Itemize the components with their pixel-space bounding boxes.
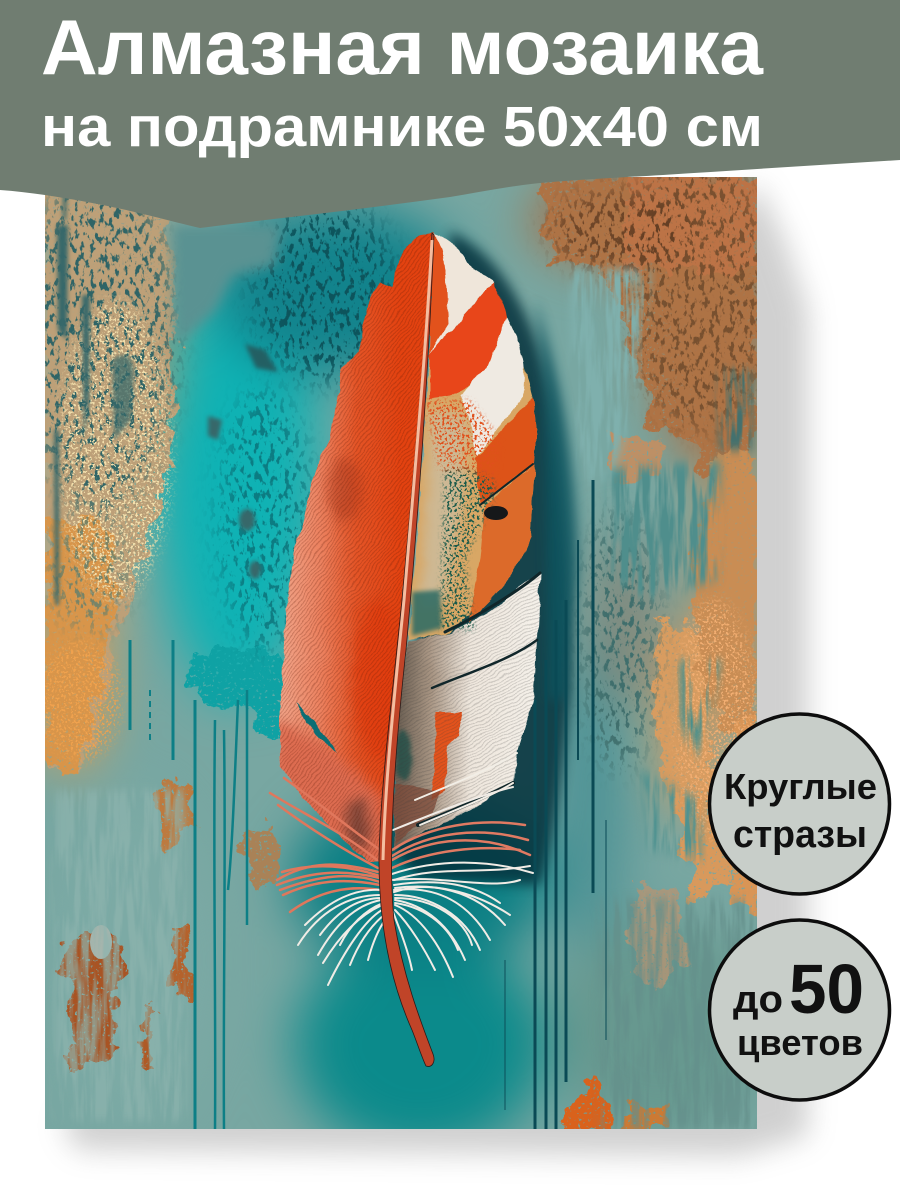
feather shaft xyxy=(379,233,434,1066)
rust patches xyxy=(64,925,190,1072)
white plume tips xyxy=(415,753,517,825)
right white barbs xyxy=(392,787,533,977)
dark teal blotches xyxy=(54,190,278,605)
canvas drop shadow xyxy=(62,182,808,1156)
painting base colour xyxy=(45,177,757,1129)
dark fleck xyxy=(484,506,508,520)
plume orange blotch xyxy=(430,712,462,800)
green and orange flecks xyxy=(425,400,500,630)
white segment of right vane xyxy=(460,317,525,457)
plume brown base xyxy=(393,785,440,845)
feather xyxy=(270,230,540,1066)
title line 2: на подрамнике 50х40 см xyxy=(41,95,763,159)
gold centre of right vane xyxy=(408,282,537,640)
plume texture xyxy=(393,573,540,850)
orange near shaft top xyxy=(430,233,448,353)
badge: up to 50 colours: 50 xyxy=(789,950,864,1028)
badge: round rhinestones: Круглые xyxy=(724,766,877,807)
badge: up to 50 colours: до xyxy=(733,979,783,1021)
badge: up to 50 colours: цветов xyxy=(737,1022,863,1063)
grey-teal panel at top centre xyxy=(172,225,280,345)
soft paint fields xyxy=(45,177,757,1129)
badge: round rhinestones: стразы xyxy=(733,814,867,856)
badge: round rhinestones xyxy=(710,714,890,894)
title line 1: Алмазная мозаика xyxy=(41,3,764,91)
header banner xyxy=(0,0,900,228)
teal brush streaks xyxy=(55,270,757,1129)
right pink barbs xyxy=(392,822,530,868)
white plumes xyxy=(393,573,540,850)
plume dark patches xyxy=(395,729,413,781)
title xyxy=(41,3,764,159)
feather dark shadow xyxy=(390,232,570,885)
left white barbs xyxy=(298,890,385,985)
dark drips right xyxy=(505,480,606,1130)
badge: up to 50 colours xyxy=(710,920,890,1100)
orange segment lower xyxy=(475,397,537,505)
mottled dark paint xyxy=(25,150,770,770)
painting: abstract background with feather xyxy=(45,177,757,1129)
teal striped corner above plumes xyxy=(412,590,442,636)
left vane shading and texture xyxy=(278,232,434,862)
copper and gold patina xyxy=(45,175,757,1130)
teal paint drips left xyxy=(130,640,247,1130)
teal halo around feather top xyxy=(535,300,578,700)
feather left vane xyxy=(280,232,433,862)
pale chip on rust patch xyxy=(90,925,112,959)
orange segment bottom right xyxy=(468,463,535,622)
orange segment upper xyxy=(430,282,507,398)
pale speckle on gold centre xyxy=(420,410,468,610)
top white segment of right vane xyxy=(430,233,493,353)
shaft highlight xyxy=(383,240,432,860)
left downy barbs xyxy=(270,778,380,912)
plume dividers xyxy=(418,464,540,825)
feather vanes xyxy=(270,230,540,870)
gold highlights xyxy=(40,300,755,840)
